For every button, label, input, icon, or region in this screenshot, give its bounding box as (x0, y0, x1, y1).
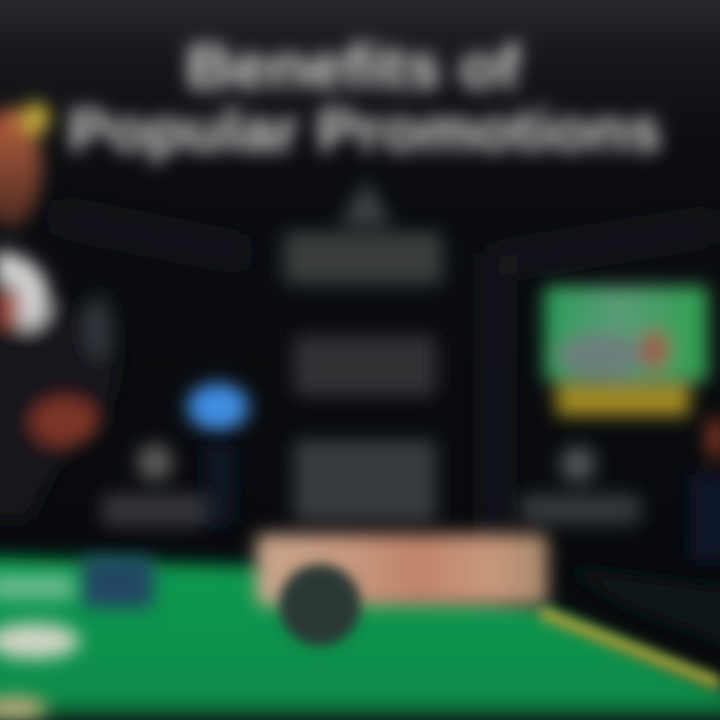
table bottom edge (0, 708, 720, 720)
center caption two (294, 336, 436, 396)
blue chip stack (82, 556, 154, 608)
tv screen (544, 286, 708, 416)
figure head (0, 108, 42, 228)
left icon (137, 444, 173, 480)
blue glow icon (187, 383, 249, 431)
title (68, 33, 662, 164)
title: Benefits of (186, 33, 520, 102)
dark poker chip (279, 564, 361, 646)
right figure red accent (706, 416, 720, 460)
cards on the felt (0, 576, 80, 720)
figure hand (31, 398, 99, 446)
screen red accent (641, 330, 669, 370)
table rail right (560, 566, 720, 650)
center column benefits (284, 180, 442, 522)
title: Popular Promotions (68, 97, 662, 164)
white card (0, 623, 80, 659)
center caption three (294, 440, 436, 522)
center caption one (284, 232, 442, 284)
corner card (0, 696, 48, 720)
wood chip rack (256, 534, 548, 606)
screen yellow banner (556, 384, 690, 416)
screen image (544, 286, 708, 382)
left column benefit (102, 444, 208, 526)
poker table felt (0, 556, 720, 720)
figure yellow accent (22, 102, 50, 134)
center icon (340, 180, 392, 224)
figure red sleeve (0, 290, 20, 325)
right icon (560, 446, 596, 482)
right figure body (690, 475, 720, 560)
screen figures (556, 333, 644, 377)
pale card top (0, 576, 74, 598)
figure white collar (0, 250, 50, 328)
back wall panel frames (50, 215, 720, 540)
figure jacket (0, 307, 118, 520)
right caption (520, 494, 640, 524)
right column benefit (520, 446, 640, 524)
blue glow stem (203, 445, 235, 525)
table yellow line (540, 612, 720, 684)
left caption (102, 494, 208, 526)
right edge figure (690, 416, 720, 560)
figure jacket highlight (84, 296, 112, 360)
figure: dealer at left (0, 102, 118, 520)
